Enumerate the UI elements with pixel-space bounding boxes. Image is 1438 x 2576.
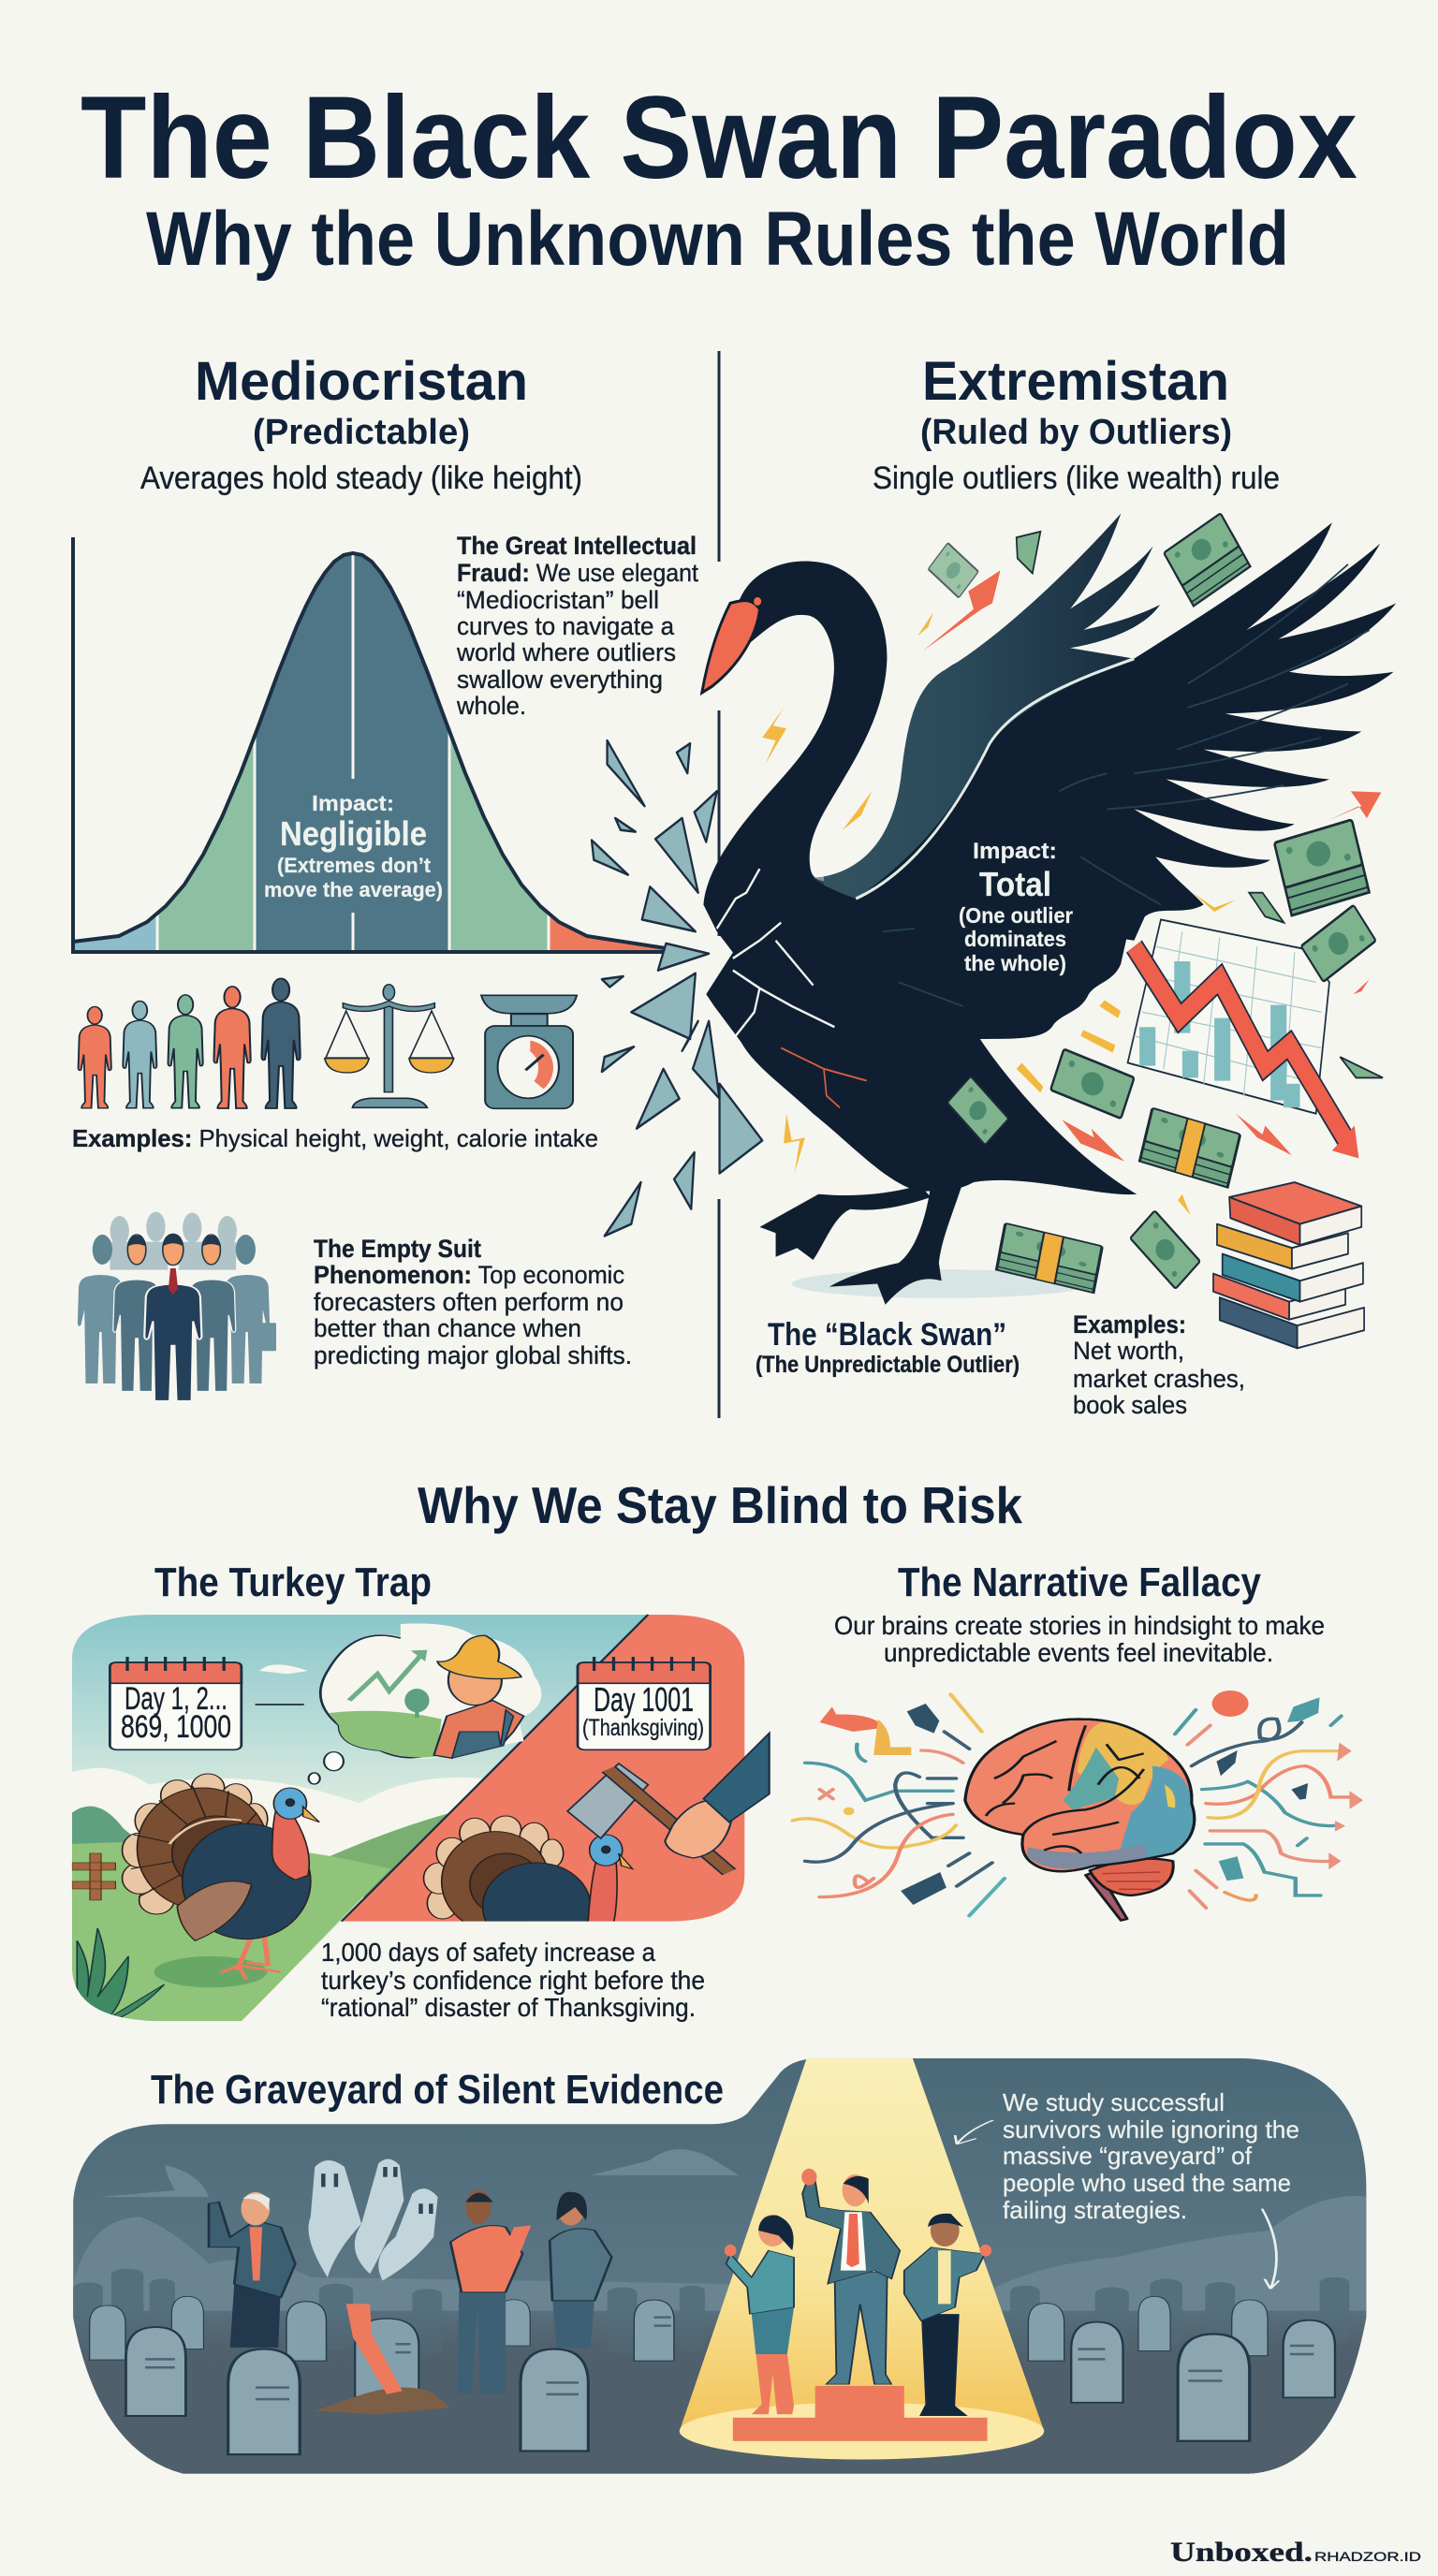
description: averages: Averages hold steady (like height) [140, 461, 582, 496]
center divider [717, 351, 721, 1418]
text block: Empty Suit Phenomenon [314, 1235, 632, 1369]
heading: Mediocristan: Mediocristan [195, 351, 528, 412]
swan body and neck [703, 561, 1137, 1194]
panel: Mediocristan heading [140, 351, 582, 496]
text: calendar labels: Day 1001 [594, 1680, 694, 1719]
bell label: impact negligible: (Extremes don’t [277, 854, 432, 877]
heading: Narrative Fallacy: The Narrative Fallacy [898, 1559, 1261, 1605]
small red arrows [923, 570, 1381, 1162]
swan impact label: (One outlier [959, 903, 1073, 928]
title: The Black Swan Paradox [81, 73, 1357, 203]
text block: Great Intellectual Fraud: The Great Intellectual [457, 532, 697, 560]
text block: graveyard description: massive “graveyard” of [1003, 2142, 1253, 2170]
turkey doomed side [342, 1615, 744, 1922]
turkey: confident [123, 1774, 319, 1980]
watermark: Unboxed. [1170, 2537, 1313, 2568]
text block: graveyard description: failing strategies. [1003, 2196, 1187, 2224]
examples: Extremistan: book sales [1073, 1391, 1187, 1419]
winner: woman [725, 2215, 794, 2414]
text block: Great Intellectual Fraud: curves to navigate a [457, 612, 675, 640]
lightning bolts [762, 612, 1236, 1215]
tombstone inscriptions [145, 2318, 1313, 2399]
swan caption [756, 1317, 1020, 1378]
swan impact label [959, 839, 1073, 975]
back tombstones [90, 2296, 1268, 2361]
bell label: impact negligible: Impact: [312, 791, 394, 815]
text block: Great Intellectual Fraud: whole. [456, 692, 526, 720]
bell label: impact negligible [264, 791, 443, 901]
text block: turkey caption: turkey’s confidence right before the [321, 1966, 705, 1995]
examples: Extremistan: market crashes, [1073, 1365, 1245, 1393]
winner: right man [904, 2214, 991, 2416]
subtitle: Why the Unknown Rules the World [146, 197, 1289, 282]
glass shards [592, 740, 762, 1236]
icon: weighing scale [481, 995, 577, 1108]
text block: narrative description: unpredictable events feel inevitable. [884, 1638, 1273, 1667]
text: calendar labels: Day 1, 2... [125, 1681, 227, 1717]
arrow: to survivors [955, 2120, 993, 2144]
swan caption: (The Unpredictable Outlier) [756, 1352, 1020, 1378]
text block: Empty Suit Phenomenon: Phenomenon: Top economic [314, 1261, 624, 1289]
ghosts [308, 2159, 438, 2280]
text block: graveyard description: We study successful [1003, 2088, 1225, 2116]
text block: graveyard description [1003, 2088, 1299, 2224]
icon: balance scale [325, 985, 454, 1107]
bell label: impact negligible: Negligible [280, 814, 427, 853]
winners podium [733, 2386, 988, 2441]
turkey: doomed with axe [423, 1816, 635, 1922]
text block: turkey caption [321, 1938, 705, 2022]
examples: Mediocristan: Examples: Physical height, weight, calorie intake [72, 1124, 598, 1152]
text block: Great Intellectual Fraud [456, 532, 698, 720]
panel: graveyard illustration [56, 2050, 1386, 2484]
book stack [1213, 1182, 1364, 1348]
tangled shapes left [820, 1704, 946, 1905]
tangled lines left [793, 1694, 1005, 1916]
tangled lines right [1175, 1710, 1356, 1908]
text block: graveyard description: survivors while ignoring the [1003, 2115, 1299, 2144]
calendar: day 1001 [578, 1657, 711, 1749]
chest cracks [717, 869, 834, 1062]
text block: narrative description: Our brains create stories in hindsight to make [834, 1611, 1325, 1640]
text: calendar labels: (Thanksgiving) [582, 1715, 704, 1741]
heading: Turkey Trap: The Turkey Trap [154, 1559, 432, 1605]
subheading: Ruled by Outliers: (Ruled by Outliers) [920, 413, 1232, 452]
text block: turkey caption: 1,000 days of safety increase a [321, 1938, 655, 1967]
swan beak [702, 601, 759, 693]
examples: Extremistan: Examples: [1073, 1310, 1186, 1339]
swan legs and feet [759, 1182, 963, 1305]
figure: man in coral sweater [450, 2189, 531, 2394]
swan caption: The “Black Swan” [768, 1317, 1006, 1353]
examples: Extremistan [1073, 1310, 1245, 1419]
text block: Great Intellectual Fraud: world where outliers [456, 638, 676, 666]
spotlight beam [680, 2058, 1044, 2459]
text block: Empty Suit Phenomenon: better than chance when [314, 1314, 581, 1342]
graveyard backdrop [56, 2050, 1386, 2484]
shovel and disturbed grave [315, 2304, 450, 2414]
text block: turkey caption: “rational” disaster of Thanksgiving. [321, 1993, 696, 2022]
illustration: brain with tangled lines [793, 1690, 1363, 1921]
icons: people, balance scale, weighing scale [79, 978, 577, 1108]
panel: Extremistan heading [873, 351, 1280, 496]
money and debris [928, 513, 1383, 1293]
turkey safe side [72, 1615, 653, 2024]
text: calendar labels [121, 1680, 704, 1745]
swan impact label: the whole) [964, 951, 1066, 975]
arrow: to graveyard [1262, 2209, 1279, 2289]
bell label: impact negligible: move the average) [264, 878, 443, 901]
watermark [1170, 2537, 1421, 2568]
text block: Empty Suit Phenomenon: predicting major global shifts. [314, 1341, 632, 1369]
text block: Great Intellectual Fraud: Fraud: We use elegant [457, 559, 698, 587]
panel: turkey illustration [72, 1615, 770, 2024]
watermark: RHADZOR.ID [1314, 2549, 1421, 2564]
heading: Extremistan: Extremistan [922, 351, 1229, 412]
wing highlights [814, 514, 1160, 899]
subheading: Predictable: (Predictable) [253, 413, 470, 452]
ground shadow [792, 1269, 1092, 1298]
winner: center man [801, 2169, 900, 2384]
calendar: day 1 to 1000 [110, 1657, 242, 1749]
description: single outliers: Single outliers (like wealth) rule [873, 461, 1280, 496]
text block: narrative description [834, 1611, 1325, 1667]
heading: Graveyard of Silent Evidence: The Graveyard of Silent Evidence [151, 2067, 724, 2113]
brain [965, 1720, 1195, 1921]
illustration: shattering black swan and chaos [592, 513, 1396, 1348]
examples: Extremistan: Net worth, [1073, 1337, 1184, 1365]
text: calendar labels: 869, 1000 [121, 1709, 231, 1745]
figure: woman in suit [550, 2192, 611, 2348]
swan wing [851, 514, 1396, 941]
front tombstones [126, 2320, 1335, 2454]
swan impact label: Total [979, 865, 1051, 903]
text block: Great Intellectual Fraud: “Mediocristan” bell [457, 586, 659, 614]
text block: Great Intellectual Fraud: swallow everything [457, 666, 663, 694]
chart: bell curve [73, 534, 670, 955]
thought bubble: farmer [309, 1623, 541, 1784]
swan impact label: dominates [964, 927, 1066, 951]
text block: Empty Suit Phenomenon: forecasters often perform no [314, 1288, 624, 1316]
text block: graveyard description: people who used the same [1003, 2169, 1291, 2197]
chart: crash [1128, 919, 1358, 1159]
figure: older man in suit [209, 2192, 295, 2348]
tangled shapes right [1212, 1690, 1363, 1881]
section heading: blind to risk: Why We Stay Blind to Risk [418, 1476, 1022, 1534]
icon: group of empty suits [78, 1212, 276, 1401]
swan impact label: Impact: [973, 839, 1057, 864]
text block: Empty Suit Phenomenon: The Empty Suit [314, 1235, 481, 1263]
icon: people of various heights [79, 978, 301, 1108]
